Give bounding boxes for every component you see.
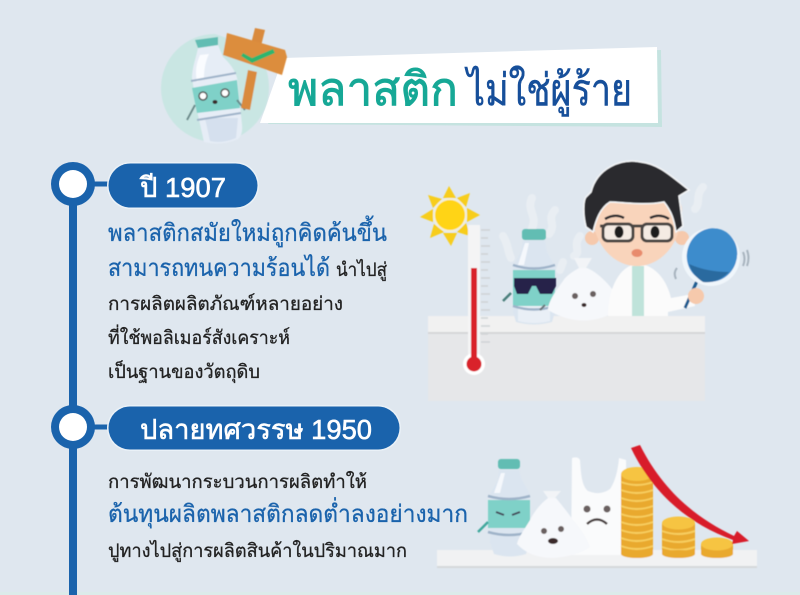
- tall coin stack: [621, 467, 653, 558]
- bottle with sunglasses: [503, 229, 556, 324]
- text block: 1907: สามารถทนความร้อนได้: [108, 254, 330, 282]
- text block: 1907: การผลิตผลิตภัณฑ์หลายอย่าง: [108, 293, 343, 315]
- text block: 1907: พลาสติกสมัยใหม่ถูกคิดค้นขึ้น: [108, 215, 387, 248]
- text block: 1950: การพัฒนากระบวนการผลิตทำให้: [108, 471, 367, 493]
- medium coin stack: [662, 516, 695, 558]
- plastic bag: [540, 258, 622, 321]
- text block: 1907: เป็นฐานของวัตถุดิบ: [108, 359, 260, 384]
- text block: 1907: [108, 215, 387, 384]
- illustration: heat test scene: [420, 161, 748, 401]
- illustration: cost falling scene: [437, 445, 757, 568]
- title text: [288, 63, 632, 117]
- heading pill: ปี 1907: ปี 1907: [139, 172, 226, 203]
- bottle character: [478, 459, 530, 556]
- text block: 1907: นำไปสู่: [336, 259, 387, 281]
- heading pill: ปี 1907: [107, 162, 259, 209]
- icon: blue hand fan: [675, 221, 748, 308]
- steam: [503, 187, 703, 270]
- title banner: [260, 47, 662, 127]
- icon: bottle mascot with wooden check sign: [161, 0, 287, 143]
- text block: 1907: ที่ใช้พอลิเมอร์สังเคราะห์: [108, 324, 290, 349]
- small coin stack: [701, 538, 733, 558]
- title text: พลาสติก: [288, 63, 458, 115]
- carrier bag face: [584, 506, 610, 524]
- shelf: [437, 550, 757, 568]
- title text: ไม่ใช่ผู้ร้าย: [465, 65, 632, 117]
- scientist: [584, 161, 695, 316]
- text block: 1950: [108, 471, 468, 562]
- timeline node 1907: [51, 162, 110, 206]
- timeline line: [69, 200, 77, 595]
- carrier bag: [571, 457, 627, 555]
- text block: 1950: ปูทางไปสู่การผลิตสินค้าในปริมาณมาก: [108, 540, 407, 562]
- icon: sun: [420, 186, 480, 246]
- heading pill: ปลายทศวรรษ 1950: [107, 405, 401, 451]
- arrow: falling cost: [631, 445, 749, 544]
- plastic bag character: [517, 491, 590, 558]
- heading pill: ปลายทศวรรษ 1950: ปลายทศวรรษ 1950: [140, 414, 372, 445]
- text block: 1950: ต้นทุนผลิตพลาสติกลดต่ำลงอย่างมาก: [108, 497, 468, 529]
- table: [428, 316, 705, 401]
- timeline node 1950: [51, 405, 110, 449]
- icon: thermometer: [463, 225, 490, 375]
